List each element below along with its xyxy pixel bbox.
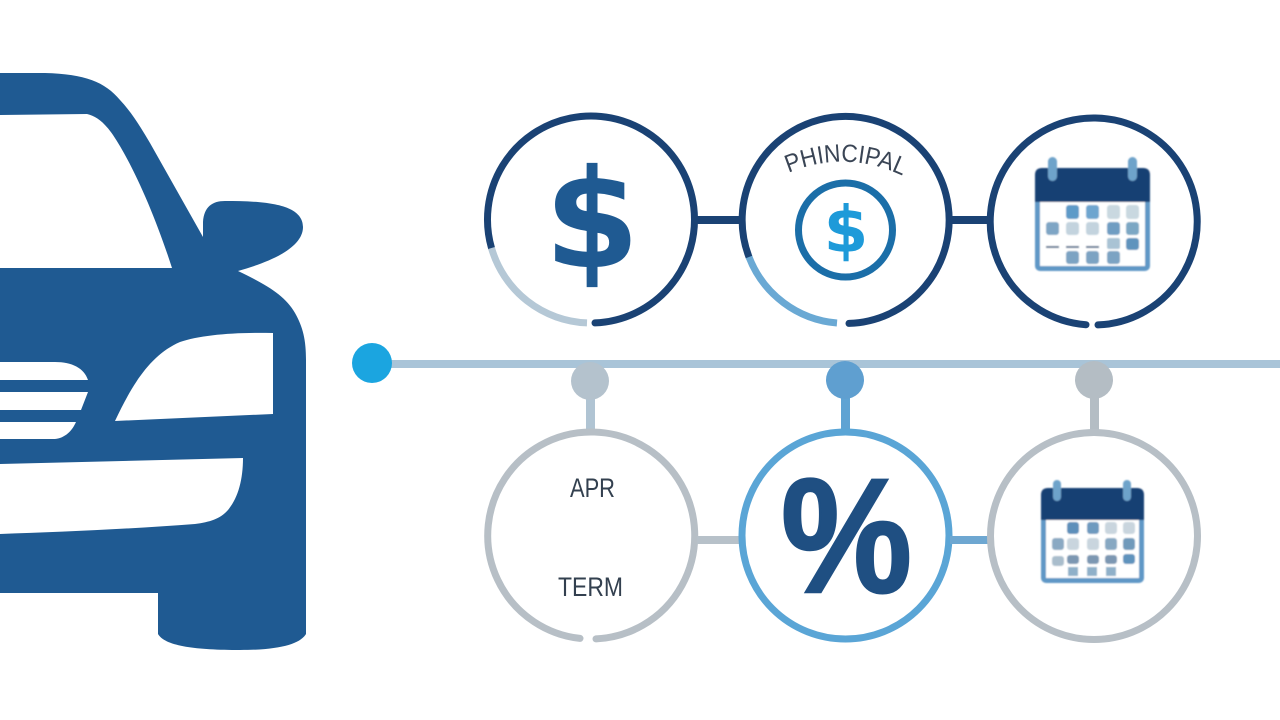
icon: dollar coin: $	[824, 194, 868, 268]
label: APR: APR	[570, 473, 615, 503]
connector: percent to calendar	[950, 536, 988, 544]
circle: APR and term	[488, 432, 695, 639]
circle: calendar bottom	[990, 432, 1198, 640]
icon: calendar bottom	[1041, 480, 1144, 583]
circle: principal	[738, 112, 953, 327]
circle: percent	[742, 432, 949, 639]
icon: large dollar sign: $	[544, 141, 640, 300]
node: percent stem	[826, 361, 864, 431]
label: principal: PHINCIPAL	[784, 144, 903, 176]
label: term: TERM	[558, 572, 623, 602]
node: APR stem	[571, 362, 609, 431]
timeline line	[372, 360, 1280, 368]
icon: car front silhouette	[0, 73, 306, 650]
circle: dollar	[487, 116, 694, 323]
timeline start dot	[352, 343, 392, 383]
icon: percent sign: %	[781, 444, 912, 627]
node: calendar stem	[1075, 361, 1113, 431]
connector: APR to percent	[697, 536, 741, 544]
connector: principal to calendar	[951, 216, 988, 224]
icon: dollar coin	[798, 183, 892, 277]
connector: dollar to principal	[695, 216, 741, 224]
circle: calendar top	[990, 118, 1197, 325]
icon: calendar top	[1035, 157, 1150, 271]
